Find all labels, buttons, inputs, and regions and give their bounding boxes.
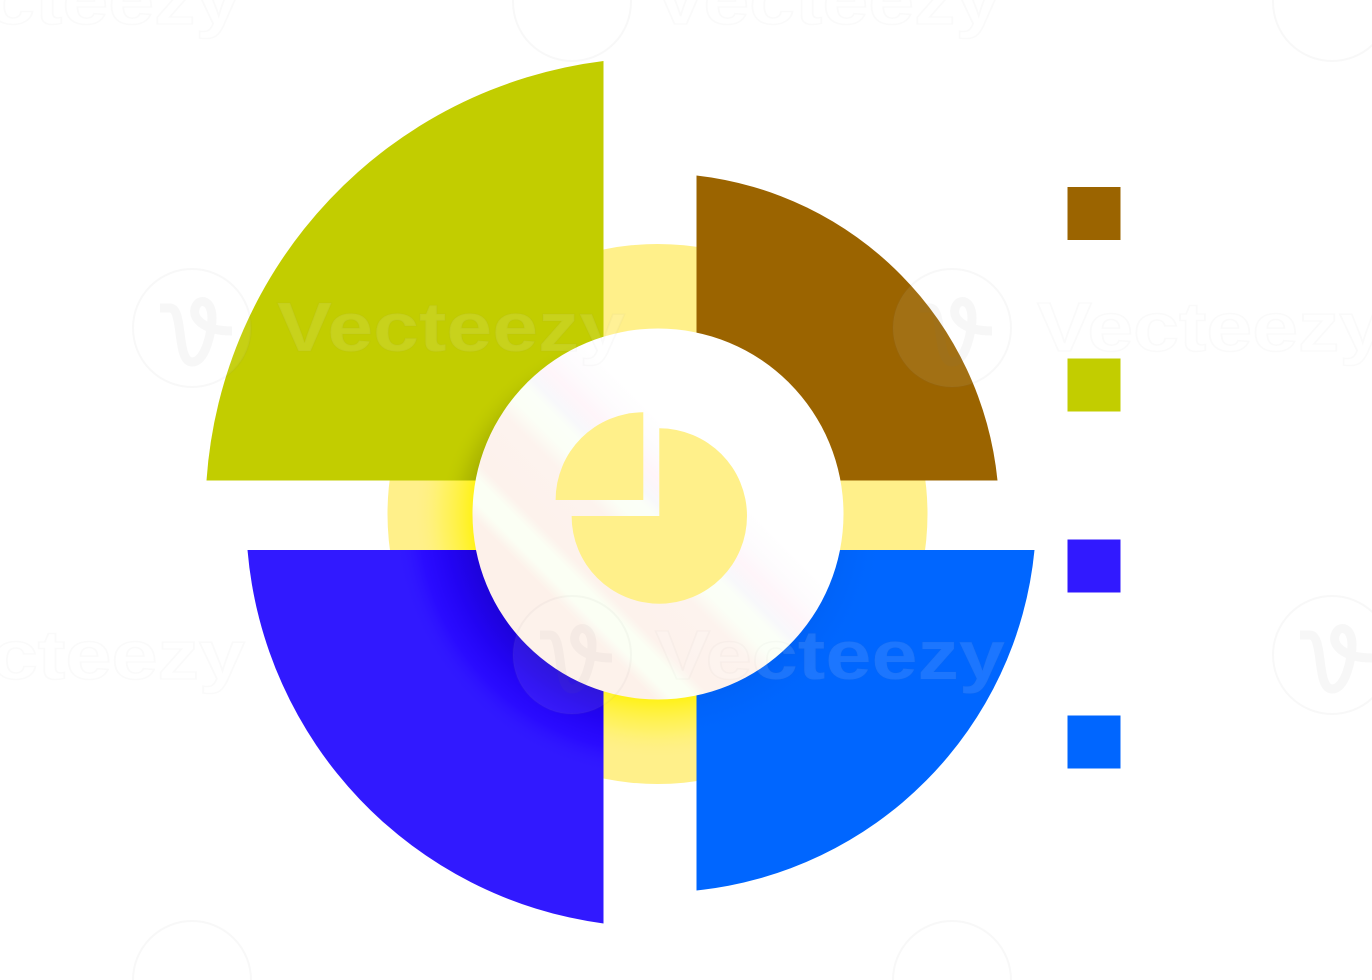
sector: olive green: [206, 61, 604, 480]
legend: bright blue: [1068, 716, 1120, 768]
legend: olive green: [1068, 358, 1120, 412]
legend: indigo blue: [1068, 540, 1120, 592]
watermark pattern: Vecteezy: [655, 616, 1005, 694]
sector: brown: [696, 176, 998, 480]
inner glow on ring: [427, 480, 696, 746]
watermark pattern: Vecteezy: [277, 288, 625, 366]
center disc: [472, 328, 844, 700]
watermark pattern: Vecteezy: [1037, 288, 1372, 366]
yellow background ring: [388, 244, 928, 784]
icon: pie chart: [556, 412, 747, 604]
sector: bright blue: [696, 550, 1034, 890]
sector: indigo blue: [248, 550, 604, 924]
legend swatches: [1068, 187, 1120, 768]
legend: brown: [1068, 187, 1120, 240]
infographic canvas: [206, 61, 1120, 924]
